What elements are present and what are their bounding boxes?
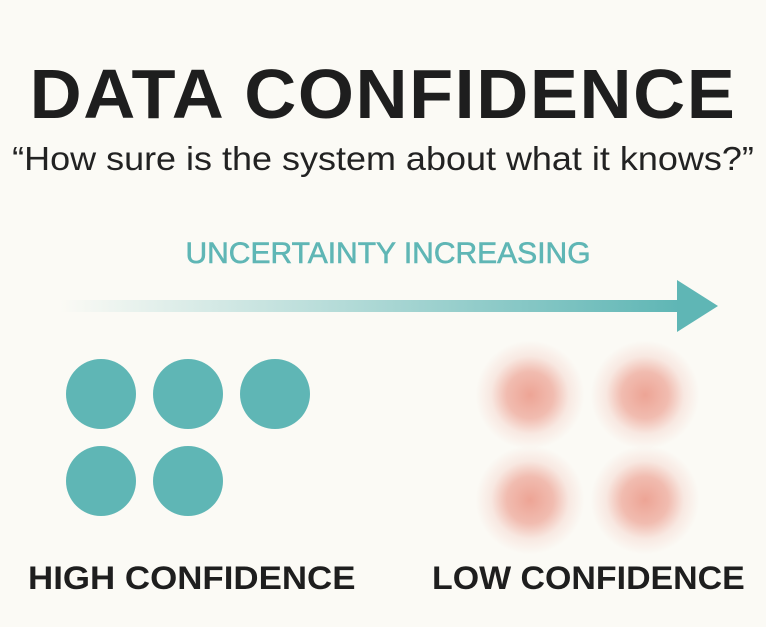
low confidence label: LOW CONFIDENCE bbox=[432, 560, 745, 596]
high confidence dots bbox=[66, 359, 310, 516]
high confidence label: HIGH CONFIDENCE bbox=[28, 560, 355, 596]
uncertainty label: UNCERTAINTY INCREASING bbox=[185, 237, 591, 270]
subtitle: “How sure is the system about what it knows?” bbox=[12, 140, 754, 177]
arrow bbox=[92, 280, 718, 332]
title: DATA CONFIDENCE bbox=[30, 55, 736, 133]
low confidence blurred dots bbox=[482, 347, 693, 548]
